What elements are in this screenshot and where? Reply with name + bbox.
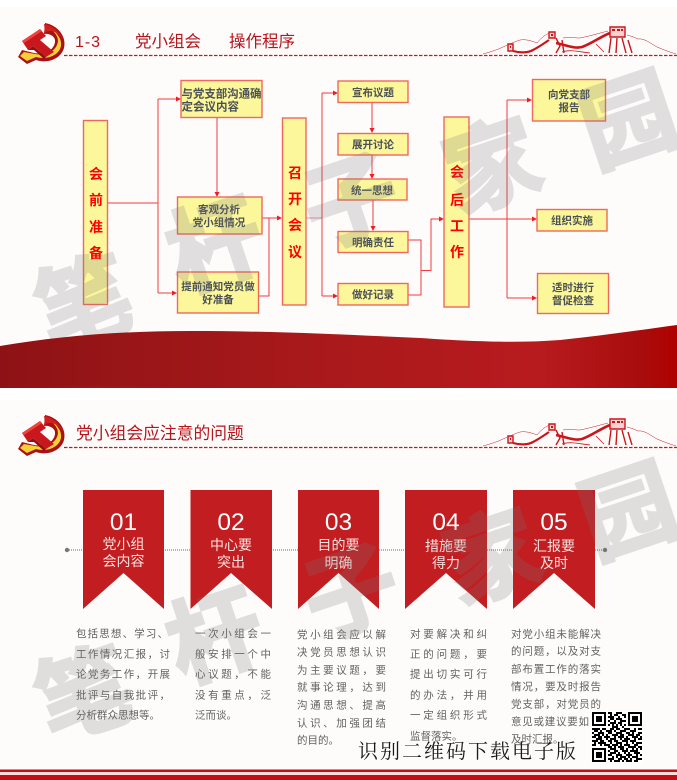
ribbon 02: 02 bbox=[217, 509, 245, 536]
text column 4: 正的问题，要 bbox=[410, 648, 487, 660]
great wall illustration bbox=[483, 419, 676, 446]
connectors: into follow-up bbox=[408, 216, 444, 295]
ribbon 04: 措施要 bbox=[425, 538, 467, 554]
ribbon 03: 03 bbox=[325, 509, 352, 536]
text column 2: 般安排一个中 bbox=[195, 648, 271, 660]
box: follow-up work: 工 bbox=[450, 218, 464, 234]
title text: 党小组会 bbox=[135, 32, 201, 51]
text column 3: 党小组会应以解 bbox=[297, 628, 386, 641]
ribbon 04 bbox=[405, 490, 487, 609]
box: supervise: 适时进行 bbox=[552, 281, 594, 294]
box: notify members bbox=[178, 272, 258, 313]
ribbon 03: 明确 bbox=[324, 555, 352, 571]
box: keep records bbox=[338, 284, 408, 305]
ribbon 03 bbox=[298, 490, 379, 609]
box: hold meeting: 议 bbox=[288, 244, 302, 260]
connectors: into meeting bbox=[258, 216, 322, 296]
box: announce topic: 宣布议题 bbox=[352, 86, 394, 99]
emblem: hammer and sickle bbox=[18, 415, 65, 456]
text column 2: 没有重点，泛 bbox=[195, 688, 272, 702]
section header: points to note bbox=[18, 415, 677, 456]
slide background: top bbox=[0, 7, 677, 388]
watermark: top slide: 子 bbox=[290, 138, 413, 267]
box: analyse group: 党小组情况 bbox=[193, 216, 246, 229]
watermark: bottom slide: 子 bbox=[290, 529, 413, 658]
text column 4: 的办法，并用 bbox=[410, 688, 487, 702]
dashed header rule bbox=[64, 446, 677, 448]
text column 2: 心议题，不能 bbox=[195, 668, 272, 680]
watermark: top slide: 笔 bbox=[23, 240, 146, 369]
ribbon 02 bbox=[190, 490, 272, 609]
box: implement: 组织实施 bbox=[551, 214, 593, 227]
timeline dotted line bbox=[65, 548, 607, 552]
box: supervise bbox=[538, 274, 608, 314]
box: analyse group bbox=[178, 197, 262, 234]
ribbon 02: 中心要 bbox=[210, 537, 252, 553]
ribbon 02: 突出 bbox=[217, 554, 245, 570]
ribbon 04: 得力 bbox=[432, 555, 460, 571]
text column 5: 情况，要及时报告 bbox=[511, 680, 601, 693]
box: implement bbox=[537, 210, 607, 231]
box: supervise: 督促检查 bbox=[552, 294, 594, 307]
handwritten QR caption: 识别二维码下载电子版 bbox=[358, 740, 576, 763]
box: confirm content: 定会议内容 bbox=[182, 100, 239, 114]
watermark: bottom slide: 家 bbox=[431, 494, 554, 623]
text column 2: 泛而谈。 bbox=[195, 708, 237, 722]
text column 5: 的问题，以及对支 bbox=[511, 644, 602, 658]
box: unify thinking: 统一思想 bbox=[351, 184, 393, 197]
text column 3: 决党员思想认识 bbox=[297, 646, 386, 658]
title number: 1-3 bbox=[75, 34, 100, 51]
box: define responsibility: 明确责任 bbox=[352, 236, 394, 249]
ribbon 05: 及时 bbox=[540, 555, 568, 571]
great wall illustration bbox=[483, 27, 676, 54]
box: unify thinking bbox=[338, 179, 407, 200]
box: hold meeting: 召 bbox=[288, 165, 302, 181]
text column 4: 对要解决和纠 bbox=[410, 628, 487, 640]
text column 3: 的目的。 bbox=[297, 734, 339, 746]
box: hold meeting: 开 bbox=[288, 191, 302, 207]
text column 3: 认识、加强团结 bbox=[297, 716, 386, 730]
watermark: bottom slide: 杆 bbox=[154, 573, 277, 702]
ribbon 05 bbox=[513, 490, 595, 609]
ribbon 01 bbox=[83, 490, 164, 609]
box: preparation stage: 准 bbox=[89, 219, 103, 235]
box: follow-up work: 作 bbox=[450, 244, 464, 260]
box: report to branch: 向党支部 bbox=[548, 88, 590, 101]
ribbon 05: 05 bbox=[540, 509, 568, 536]
text column 1: 论党务工作，开展 bbox=[76, 668, 170, 680]
ribbon 01: 01 bbox=[110, 509, 137, 536]
text column 5 bbox=[511, 628, 602, 746]
box: preparation stage bbox=[84, 120, 108, 304]
connectors: follow-up branch bbox=[469, 98, 537, 300]
title text part two: 操作程序 bbox=[229, 32, 295, 51]
ribbon 01: 会内容 bbox=[102, 553, 144, 569]
box: discussion bbox=[338, 134, 408, 155]
ribbon 01: 党小组 bbox=[102, 536, 144, 552]
text column 1: 分析群众思想等。 bbox=[76, 708, 160, 722]
box: report to branch bbox=[532, 80, 606, 121]
connectors: meeting steps bbox=[322, 90, 376, 298]
text column 4: 一定组织形式 bbox=[410, 708, 488, 722]
text column 3: 就事论理，达到 bbox=[297, 680, 386, 694]
box: analyse group: 客观分析 bbox=[198, 203, 240, 216]
text column 4 bbox=[410, 628, 488, 742]
text column 2 bbox=[195, 627, 272, 722]
watermark: top slide: 家 bbox=[431, 103, 554, 232]
box: keep records: 做好记录 bbox=[352, 288, 394, 301]
text column 5: 党支部，对党员的 bbox=[511, 698, 601, 710]
box: notify members: 提前通知党员做 bbox=[181, 280, 255, 293]
ribbon 03: 目的要 bbox=[318, 537, 360, 553]
watermark: top slide: 杆 bbox=[154, 182, 277, 311]
box: confirm content bbox=[181, 80, 262, 118]
connectors: preparation branch bbox=[108, 96, 220, 296]
text column 5: 意见或建议要如 bbox=[511, 715, 589, 728]
box: preparation stage: 前 bbox=[89, 192, 103, 208]
dashed header rule bbox=[64, 54, 677, 56]
text column 1: 包括思想、学习、 bbox=[76, 627, 168, 640]
text column 4: 监督落实。 bbox=[410, 730, 462, 742]
box: define responsibility bbox=[338, 232, 408, 252]
text column 4: 提出切实可行 bbox=[410, 668, 488, 680]
bottom red bars bbox=[0, 770, 677, 780]
box: hold meeting bbox=[282, 118, 306, 305]
box: announce topic bbox=[338, 81, 408, 102]
text column 5: 对党小组未能解决 bbox=[511, 628, 602, 640]
text column 1: 工作情况汇报，讨 bbox=[76, 648, 170, 660]
box: follow-up work: 后 bbox=[450, 192, 464, 208]
section header: operating procedure bbox=[18, 23, 677, 64]
box: preparation stage: 会 bbox=[89, 166, 103, 182]
text column 3 bbox=[297, 628, 386, 746]
box: hold meeting: 会 bbox=[288, 217, 302, 233]
box: confirm content: 与党支部沟通确 bbox=[182, 86, 262, 100]
box: follow-up work: 会 bbox=[450, 164, 464, 180]
watermark: bottom slide: 笔 bbox=[23, 631, 146, 760]
slide background: bottom bbox=[0, 400, 677, 780]
text column 2: 一次小组会一 bbox=[195, 627, 272, 640]
box: notify members: 好准备 bbox=[202, 293, 234, 306]
text column 1 bbox=[76, 627, 170, 722]
watermark: bottom slide bbox=[32, 456, 677, 734]
watermark: top slide bbox=[32, 65, 677, 339]
title text: 党小组会应注意的问题 bbox=[76, 424, 244, 443]
text column 3: 为主要议题，要 bbox=[297, 664, 386, 676]
ribbon 04: 04 bbox=[432, 509, 460, 536]
text column 5: 及时汇报。 bbox=[511, 732, 564, 746]
text column 1: 批评与自我批评， bbox=[76, 688, 170, 702]
ribbon 05: 汇报要 bbox=[533, 538, 575, 554]
box: preparation stage: 备 bbox=[89, 245, 103, 261]
box: follow-up work bbox=[444, 117, 469, 307]
text column 3: 沟通思想、提高 bbox=[297, 698, 386, 712]
box: report to branch: 报告 bbox=[558, 101, 580, 114]
box: discussion: 展开讨论 bbox=[352, 138, 394, 151]
text column 5: 部布置工作的落实 bbox=[511, 662, 601, 676]
red wave banner bbox=[0, 325, 677, 388]
emblem: hammer and sickle bbox=[18, 23, 65, 64]
QR code bbox=[591, 711, 643, 763]
